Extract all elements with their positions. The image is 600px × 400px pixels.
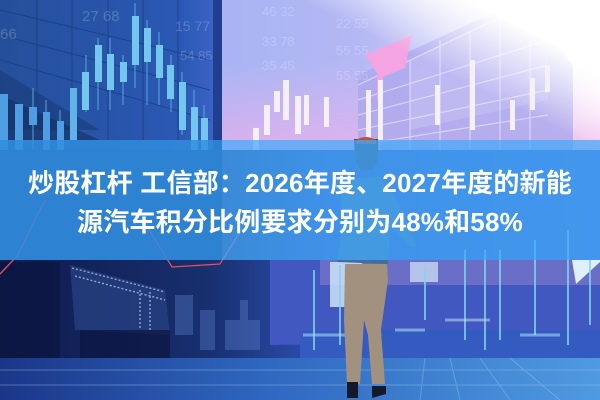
translucent title band xyxy=(0,140,600,260)
faint background numbers: 35 45 xyxy=(262,58,295,73)
title: 炒股杠杆 工信部：2026年度、2027年度的新能 xyxy=(28,168,572,198)
title: 源汽车积分比例要求分别为48%和58% xyxy=(77,207,523,237)
title xyxy=(28,168,572,237)
businessman figure xyxy=(337,137,417,398)
candlestick chart xyxy=(0,3,550,150)
white top right glow xyxy=(300,0,600,150)
red trend line xyxy=(0,200,240,274)
faint background numbers: 33 78 xyxy=(262,34,295,49)
faint background numbers xyxy=(0,4,369,83)
faint background numbers: 54 85 xyxy=(180,48,213,63)
lower city scene xyxy=(0,150,600,400)
building xyxy=(358,5,573,150)
faint background numbers: 66 xyxy=(0,26,17,43)
faint background numbers: 15 77 xyxy=(175,18,210,34)
faint background numbers: 27 68 xyxy=(82,8,120,25)
faint background numbers: 46 32 xyxy=(262,4,295,19)
faint background numbers: 22 55 xyxy=(336,16,369,31)
faint background numbers: 55 55 xyxy=(336,68,369,83)
faint background numbers: 55 55 xyxy=(336,43,369,58)
